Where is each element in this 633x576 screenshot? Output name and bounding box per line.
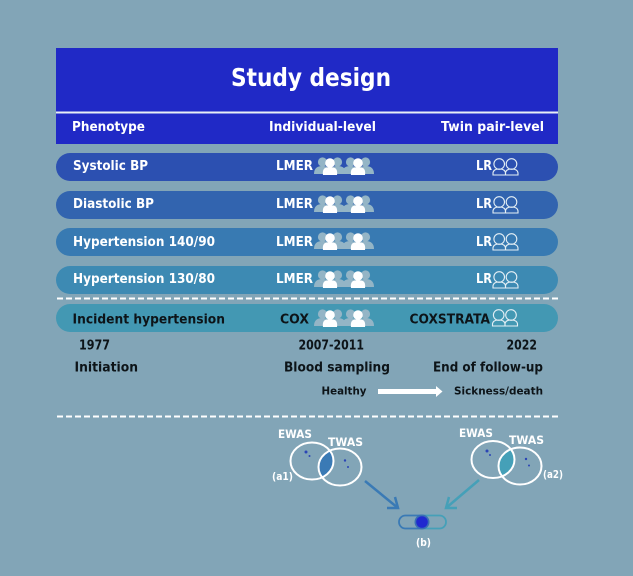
overlap result b: [399, 514, 446, 549]
venn diagram a2: TWAS: [509, 433, 544, 447]
column headings: Individual-level: [269, 119, 376, 135]
row: Incident hypertension: [56, 304, 558, 332]
row: Hypertension 130/80: LMER: [276, 271, 314, 287]
timeline years: 2007-2011: [298, 338, 364, 354]
column headings: Twin pair-level: [441, 119, 544, 135]
venn diagram a1: [272, 427, 363, 486]
venn diagram a2: [459, 426, 563, 484]
row: Hypertension 140/90: LMER: [276, 234, 314, 250]
row: Systolic BP: Systolic BP: [73, 158, 148, 174]
row: Incident hypertension: COXSTRATA: [410, 312, 490, 328]
healthy to sickness arrow: [322, 384, 543, 398]
header panel: [56, 48, 558, 144]
row: Incident hypertension: COX: [280, 312, 310, 328]
row: Hypertension 130/80: Hypertension 130/80: [73, 271, 215, 287]
row: Incident hypertension: Incident hypertension: [72, 312, 225, 328]
venn diagram a1: TWAS: [328, 435, 363, 449]
arrow: a1 to b: [365, 481, 398, 508]
row: Hypertension 140/90: LR: [476, 234, 493, 250]
row: Systolic BP: [56, 153, 558, 181]
row: Diastolic BP: [56, 191, 558, 219]
timeline years: 2022: [506, 338, 537, 354]
row: Diastolic BP: Diastolic BP: [73, 196, 154, 212]
row: Diastolic BP: LR: [476, 196, 493, 212]
row: Hypertension 130/80: [56, 266, 558, 294]
row: Systolic BP: LMER: [276, 158, 314, 174]
timeline labels: End of follow-up: [433, 360, 543, 376]
row: Hypertension 140/90: [56, 228, 558, 256]
healthy to sickness arrow: Healthy: [322, 384, 366, 398]
title: Study design: [231, 63, 391, 92]
row: Hypertension 130/80: LR: [476, 271, 493, 287]
column headings: Phenotype: [72, 119, 145, 135]
timeline labels: Blood sampling: [284, 360, 390, 376]
timeline years: 1977: [79, 338, 110, 354]
overlap result b: (b): [416, 536, 431, 549]
venn diagram a1: EWAS: [278, 427, 312, 441]
venn diagram a2: (a2): [543, 468, 563, 481]
venn diagram a1: (a1): [272, 470, 293, 483]
timeline labels: Initiation: [74, 360, 138, 376]
row: Hypertension 140/90: Hypertension 140/90: [73, 234, 215, 250]
timeline labels: [74, 360, 543, 376]
timeline years: [79, 338, 537, 354]
healthy to sickness arrow: Sickness/death: [454, 384, 543, 398]
venn diagram a2: EWAS: [459, 426, 493, 440]
row: Diastolic BP: LMER: [276, 196, 314, 212]
column headings: [72, 119, 544, 135]
row: Systolic BP: LR: [476, 158, 493, 174]
arrow: a2 to b: [446, 480, 479, 508]
